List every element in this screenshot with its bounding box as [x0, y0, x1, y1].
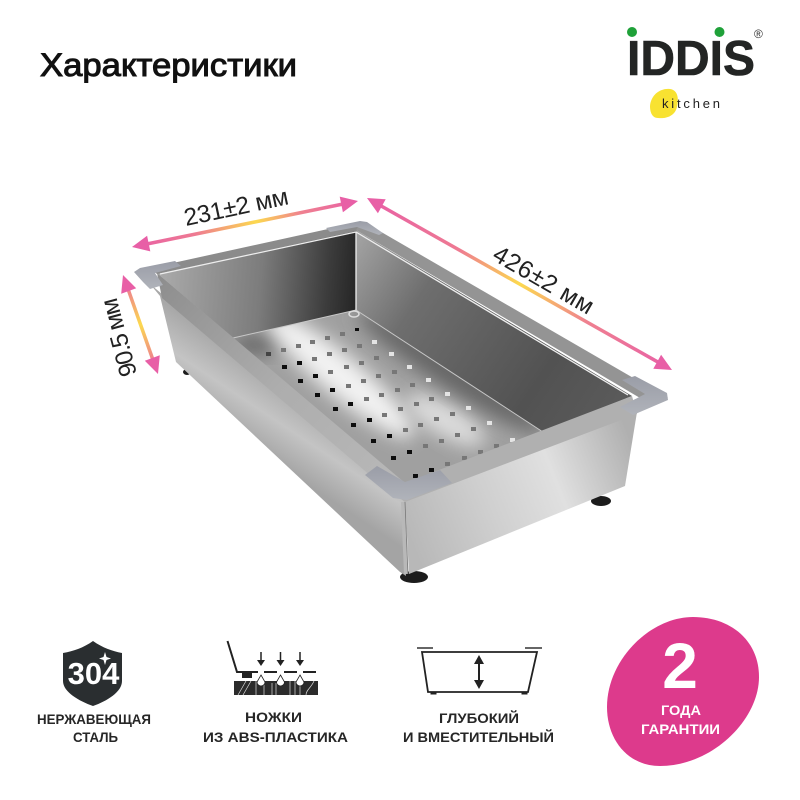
right lip — [356, 224, 668, 398]
logo kitchen word: kitchen — [662, 96, 720, 111]
feature: ABS feet — [203, 641, 348, 745]
warranty number: 2 — [662, 630, 698, 702]
warranty label — [641, 702, 720, 737]
badge blob — [607, 617, 759, 766]
corner piece: front — [365, 466, 452, 500]
warranty label: ГОДА — [661, 702, 701, 718]
corner piece: left — [134, 261, 181, 289]
feature: stainless steel — [37, 641, 151, 745]
right outer face — [405, 412, 637, 574]
perforated floor — [233, 310, 542, 482]
logo: IDDIS kitchen — [627, 27, 763, 118]
front lip — [378, 396, 637, 502]
warranty label: ГАРАНТИИ — [641, 721, 720, 737]
near lip — [157, 273, 405, 483]
logo registered mark: ® — [754, 27, 763, 41]
label: deep and spacious — [403, 709, 554, 745]
label: ABS feet — [203, 709, 348, 745]
label: stainless steel: НЕРЖАВЕЮЩАЯ — [37, 711, 151, 727]
label: stainless steel — [37, 711, 151, 745]
label: length: 426±2 мм — [488, 241, 598, 320]
feature: deep and spacious — [403, 648, 554, 745]
icon: feet on wood — [228, 641, 318, 695]
grey holes — [266, 332, 499, 466]
label: ABS feet: НОЖКИ — [245, 709, 302, 725]
left outer face — [150, 284, 406, 576]
drain hole — [349, 311, 359, 317]
arrow: width dimension — [132, 197, 358, 251]
label: stainless steel: СТАЛЬ — [73, 729, 118, 745]
back wall — [157, 230, 356, 338]
arrow: height dimension — [121, 275, 160, 374]
logo wordmark: IDDIS — [627, 32, 755, 86]
title: Характеристики — [40, 47, 297, 83]
corner piece: back — [326, 221, 383, 235]
logo dots — [627, 27, 724, 37]
wall highlights — [160, 232, 628, 395]
strainer basket — [134, 221, 668, 583]
label: height: 90.5 мм — [96, 295, 143, 379]
warranty badge — [607, 617, 759, 766]
icon: deep bowl — [417, 648, 542, 694]
right inner wall — [356, 230, 632, 432]
arrow: length dimension — [367, 198, 672, 370]
floor edges — [233, 310, 543, 432]
corner piece: right — [620, 376, 668, 415]
dark holes — [282, 328, 434, 478]
label: width: 231±2 мм — [182, 183, 291, 232]
label: ABS feet: ИЗ ABS-ПЛАСТИКА — [203, 729, 348, 745]
feet — [183, 369, 611, 583]
logo yellow blob — [650, 89, 678, 118]
label: deep and spacious: И ВМЕСТИТЕЛЬНЫЙ — [403, 728, 554, 745]
front vertical seam — [403, 502, 406, 574]
icon: shield 304: 304 — [68, 656, 120, 691]
back lip — [150, 222, 360, 274]
label: deep and spacious: ГЛУБОКИЙ — [439, 709, 519, 726]
light holes — [372, 340, 515, 442]
